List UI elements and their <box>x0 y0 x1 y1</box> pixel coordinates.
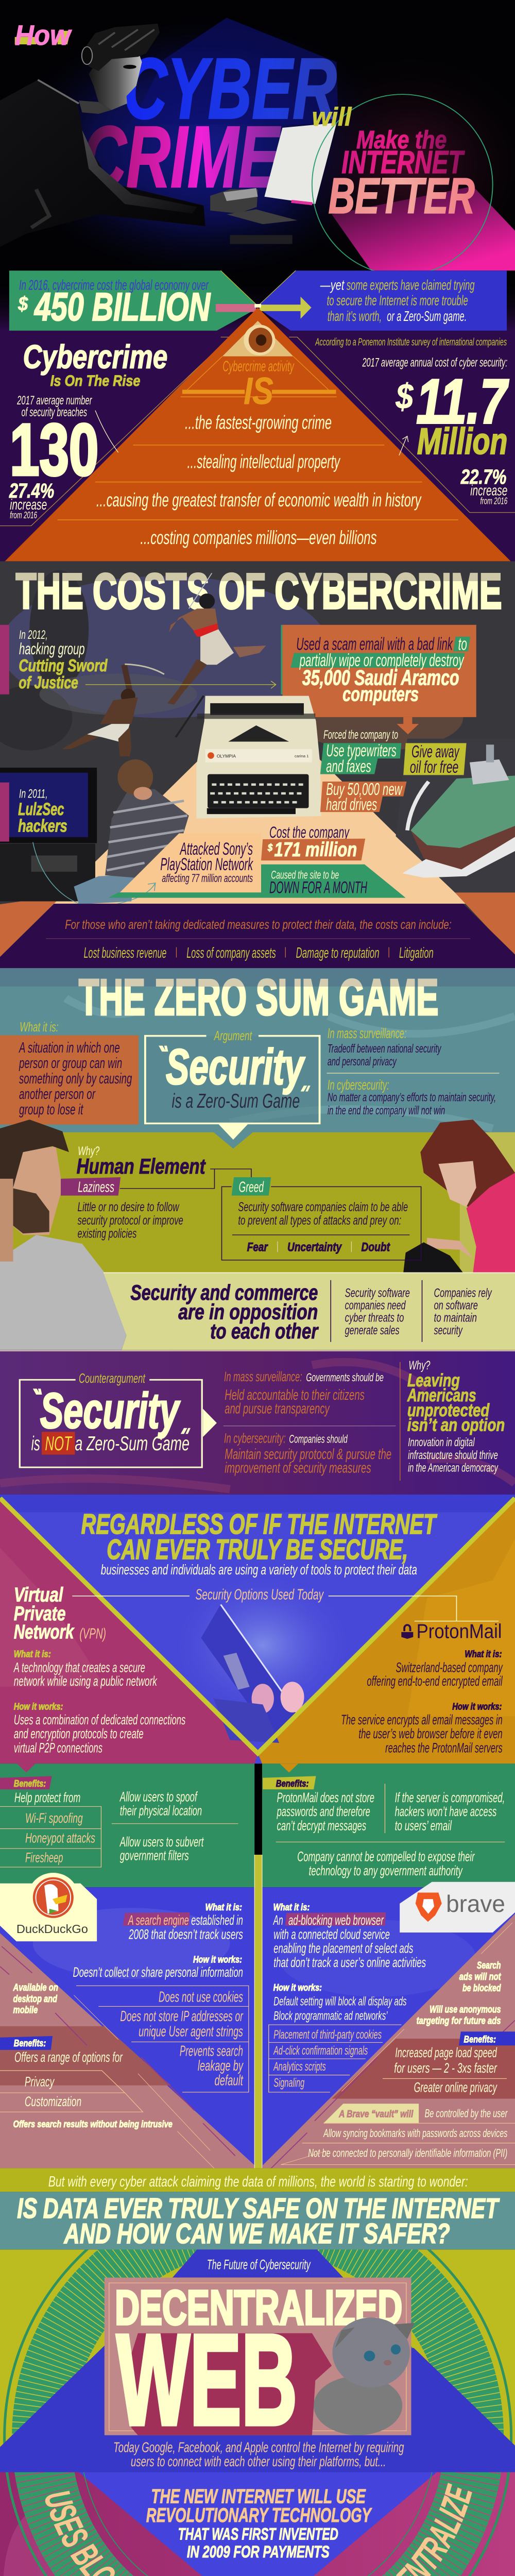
title: Make the Internet Better: Make the <box>356 126 447 154</box>
text block: greed: to prevent all types of attacks and prey on: <box>238 1213 401 1228</box>
panel: decentralized web <box>0 2277 515 2576</box>
panel: cybercrime is on the rise: Cybercrime <box>23 338 167 376</box>
panel: DuckDuckGo benefits: Offers search results without being intrusive <box>13 2119 173 2130</box>
panel: cybercrime is on the rise: Is On The Rise <box>50 372 140 389</box>
heading: regardless of if the internet <box>81 1509 437 1578</box>
panel: Brave text: Signaling <box>273 2076 304 2090</box>
panel: annual cost: $ <box>396 377 414 416</box>
panel: DuckDuckGo text: unique User agent strings <box>139 2024 243 2040</box>
text block: human element: Laziness <box>78 1179 114 1195</box>
text block: counter applications: improvement of security measures <box>225 1460 371 1476</box>
text block: greed: Fear <box>247 1241 268 1254</box>
text block: greed: Greed <box>239 1179 264 1195</box>
panel: DuckDuckGo benefits: Benefits: <box>14 2038 46 2049</box>
panel: VPN: Private <box>14 1602 66 1624</box>
text block: what it is: something only by causing <box>19 1071 132 1087</box>
callout: Aramco consequences: Buy 50,000 new <box>326 780 403 799</box>
text block: human element: Human Element <box>77 1155 206 1179</box>
text block: greed: Doubt <box>362 1241 390 1254</box>
text: pyramid statements <box>96 412 422 549</box>
panel: hero and pyramid <box>0 0 515 591</box>
counterargument box: a Zero-Sum Game <box>75 1432 190 1454</box>
panel: VPN benefits: Help protect from <box>14 1790 80 1805</box>
panel: VPN benefits <box>0 1776 238 1867</box>
icon: DuckDuckGo logo: DuckDuckGo <box>16 1923 88 1936</box>
green benefits panels <box>0 1764 515 1887</box>
text block: human element: security protocol or improve <box>78 1213 183 1228</box>
panel: DuckDuckGo benefits: Privacy <box>25 2074 55 2089</box>
panel: VPN benefits: Allow users to subvert <box>119 1834 204 1850</box>
callout: Sony PlayStation: affecting 77 million accounts <box>162 872 253 885</box>
panel: Brave benefits <box>281 1960 515 2165</box>
text: Cybercrime activity IS: Cybercrime activity <box>222 359 295 375</box>
panel: cybercrime is on the rise <box>9 338 167 521</box>
text: Cutting Sword of Justice <box>0 625 276 694</box>
illustration: typewriter: OLYMPIA <box>217 754 236 758</box>
icon: kitten <box>314 2317 415 2435</box>
panel: VPN benefits: Wi-Fi spoofing <box>25 1810 83 1826</box>
title: Make the Internet Better <box>329 126 475 224</box>
text block: what it is: What it is: <box>20 1019 59 1035</box>
panel: DuckDuckGo text: leakage by <box>198 2058 244 2074</box>
callout: Aramco consequences: hard drives <box>326 795 377 814</box>
panel: VPN benefits: government filters <box>120 1848 189 1863</box>
text block: human element <box>61 1144 251 1241</box>
text: new internet: THAT WAS FIRST INVENTED <box>178 2525 338 2544</box>
callout: cost of the attacks: $ <box>267 842 273 854</box>
icon: Brave logo <box>400 1882 515 1933</box>
text: Cutting Sword of Justice: hacking group <box>19 640 85 658</box>
panel: costs list band: Damage to reputation <box>296 945 380 961</box>
panel: ProtonMail <box>341 1620 503 1755</box>
text block: counter applications: Maintain security protocol & pursue the <box>225 1446 391 1463</box>
panel: Brave text: Block programmatic ad networks’ <box>273 2009 388 2023</box>
text block: counter applications: and pursue transparency <box>225 1401 330 1417</box>
panel: ProtonMail benefits: ProtonMail does not store <box>277 1790 374 1805</box>
counterargument box: Security <box>40 1383 181 1439</box>
panel: VPN: (VPN) <box>79 1626 106 1642</box>
panel: VPN benefits: Honeypot attacks <box>25 1831 95 1845</box>
panel: decentralized title box: WEB <box>116 2308 297 2452</box>
illustration: TV and stand: In 2011, <box>19 787 47 801</box>
panel: costs of cybercrime <box>0 561 515 970</box>
callout: Sony PlayStation: Attacked Sony’s <box>179 839 253 858</box>
text: new internet <box>146 2485 372 2561</box>
panel: ProtonMail: What it is: <box>465 1649 502 1659</box>
panel: security and commerce: on software <box>434 1299 478 1312</box>
illustration: typewriter <box>176 696 321 819</box>
text: pyramid statements: ...the fastest-growing crime <box>185 412 332 433</box>
callout: Saudi Aramco <box>281 625 476 734</box>
long shadow of BETTER <box>332 187 515 270</box>
security options used today label <box>72 1587 499 1621</box>
panel: ProtonMail benefits: to users’ email <box>395 1818 452 1833</box>
pyramid tier lines <box>58 445 458 520</box>
panel: DuckDuckGo text: A search engine <box>128 1912 189 1928</box>
panel: cybercrime is on the rise: 130 <box>10 409 98 490</box>
panel: security and commerce: generate sales <box>345 1324 400 1337</box>
icon: laptop screen <box>264 123 337 205</box>
callout: Aramco consequences: oil for free <box>410 757 458 776</box>
panel: security and commerce <box>104 1273 515 1350</box>
text block: counter applications: In mass surveillance: <box>224 1369 302 1384</box>
text block: what it is: person or group can win <box>19 1056 122 1072</box>
panel: costs list band: Litigation <box>399 945 434 961</box>
panel: DuckDuckGo text: 2008 that doesn’t track users <box>128 1927 243 1942</box>
text block: leaving Americans unprotected <box>400 1359 505 1481</box>
photo: frustrated woman <box>403 1120 515 1273</box>
text block: human element: Little or no desire to follow <box>78 1199 180 1214</box>
panel: VPN benefits: their physical location <box>120 1803 202 1818</box>
text: Cybercrime activity IS <box>181 359 337 412</box>
illustration: TV and stand: hackers <box>18 816 67 836</box>
text block: applications of the argument <box>327 1026 499 1117</box>
panel: cybercrime is on the rise: 2017 average number <box>17 394 92 408</box>
arrow: curved LulzSec pointer <box>33 842 156 907</box>
panel: cybercrime is on the rise: 27.4% <box>9 479 54 502</box>
illustration: phone in hand <box>201 1604 304 1743</box>
panel: ProtonMail benefits <box>263 1776 505 1878</box>
callout: cost of the attacks: Caused the site to be <box>271 868 339 881</box>
counterargument box: is <box>31 1432 40 1454</box>
illustration: crouching fighter <box>62 664 164 756</box>
callout: cost of the attacks: DOWN FOR A MONTH <box>269 878 367 897</box>
panel: security and commerce: security <box>434 1324 463 1337</box>
panel: DuckDuckGo text <box>73 1902 249 2092</box>
panel: annual cost <box>315 335 509 506</box>
panel: cybercrime is on the rise: of security breaches <box>21 405 87 419</box>
band: but with every cyber attack <box>0 2168 515 2192</box>
callout: Saudi Aramco: computers <box>342 683 419 705</box>
panel: security and commerce: are in opposition <box>178 1300 318 1324</box>
banner: 450 billion: 450 BILLION <box>34 285 211 329</box>
panel: VPN: What it is: <box>14 1649 51 1659</box>
photo: worried man <box>0 1120 127 1350</box>
panel: cybercrime is on the rise: increase <box>10 497 47 513</box>
illustration: jumping fighter <box>167 573 266 705</box>
panel: DuckDuckGo text: Prevents search <box>180 2043 243 2059</box>
panel: DuckDuckGo text: What it is: <box>205 1902 242 1913</box>
text block: counter applications: Governments should be <box>306 1371 384 1384</box>
panel: costs list band: Lost business revenue <box>84 945 166 961</box>
panel: VPN benefits: Benefits: <box>14 1778 46 1789</box>
text block: counter applications: Held accountable to their citizens <box>225 1387 365 1403</box>
callout: Aramco consequences: Use typewriters <box>326 741 397 760</box>
panel: VPN: and encryption protocols to create <box>14 1726 144 1741</box>
panel: Brave text: ad-blocking web browser <box>288 1912 384 1928</box>
text: Cutting Sword of Justice: Cutting Sword <box>19 656 108 675</box>
counterargument box: Counterargument <box>79 1370 146 1386</box>
panel: security and commerce: companies need <box>345 1299 406 1312</box>
panel: ProtonMail benefits: can’t decrypt messages <box>277 1818 366 1833</box>
blue chevron <box>0 2345 515 2472</box>
background blobs <box>3 2507 512 2576</box>
text: Cutting Sword of Justice: In 2012, <box>19 628 47 641</box>
panel: DuckDuckGo benefits: Offers a range of options for <box>14 2049 123 2064</box>
title: Make the Internet Better: INTERNET <box>341 144 465 180</box>
illustration: oil tanker <box>396 739 515 892</box>
callout: cost of the attacks: 171 million <box>274 838 357 861</box>
security options used today label: Security Options Used Today <box>195 1587 324 1603</box>
hero circle <box>312 94 493 275</box>
panel: olive why <box>0 1132 515 1273</box>
panel: Brave text: enabling the placement of select ads <box>273 1941 413 1956</box>
illustration: man at laptop <box>0 24 297 247</box>
arrow: banner pointer <box>216 297 312 319</box>
panel: DuckDuckGo text: established in <box>191 1912 243 1928</box>
panel: Brave text: with a connected cloud service <box>273 1927 390 1942</box>
panel: Brave benefits: Search <box>477 1960 501 1971</box>
text block: applications of the argument: In cybersecurity: <box>328 1077 389 1093</box>
argument quote box: Argument <box>214 1028 252 1043</box>
illustration: TV and stand: LulzSec <box>18 799 64 819</box>
panel: security and commerce: to maintain <box>434 1311 477 1325</box>
panel: DuckDuckGo text: Doesn’t collect or share personal information <box>73 1964 243 1980</box>
text block: what it is: group to lose it <box>19 1101 83 1117</box>
icon: DuckDuckGo logo <box>0 1873 97 1941</box>
panel: DuckDuckGo text: Does not store IP addresses or <box>120 2009 244 2025</box>
panel: Brave text: Placement of third-party cookies <box>273 2028 382 2042</box>
blue triangle <box>79 2472 437 2576</box>
text block: counter applications: In cybersecurity: <box>224 1431 286 1446</box>
illustration: TV and stand <box>0 768 97 901</box>
ring band: blockchain arc <box>5 2472 510 2576</box>
text: today Google Facebook Apple <box>113 2440 404 2470</box>
panel: ProtonMail benefits: Benefits: <box>276 1778 308 1789</box>
banner: 450 billion: $ <box>18 294 28 315</box>
panel: VPN: network while using a public network <box>14 1674 158 1689</box>
text block: applications of the argument: In mass surveillance: <box>328 1026 407 1042</box>
banner: the future of cybersecurity: The Future of Cybersecurity <box>207 2257 311 2272</box>
text block: what it is <box>0 1019 139 1125</box>
panel: VPN: virtual P2P connections <box>14 1740 102 1755</box>
text block: leaving Americans unprotected: Leaving <box>407 1370 460 1390</box>
callout: Saudi Aramco: to <box>458 634 467 654</box>
panel: VPN: Uses a combination of dedicated connections <box>14 1712 185 1727</box>
text: Cutting Sword of Justice: of Justice <box>19 673 78 692</box>
text: new internet: THE NEW INTERNET WILL USE <box>151 2485 366 2507</box>
text block: counter applications: Companies should <box>289 1433 348 1445</box>
text block: what it is: A situation in which one <box>19 1040 120 1056</box>
background haze <box>0 570 463 751</box>
text block: greed: Uncertainty <box>287 1241 342 1254</box>
banner: 450 billion: —yet <box>320 278 345 293</box>
panel: Brave benefits: A Brave “vault” will <box>338 2109 414 2120</box>
panel: security and commerce: Security software <box>345 1286 410 1300</box>
icon: Brave logo: brave <box>446 1891 505 1917</box>
illustration: gamer from behind <box>74 759 189 904</box>
panel: cybercrime is on the rise: from 2016 <box>10 510 37 521</box>
text block: counter applications <box>224 1369 396 1476</box>
text block: what it is: another person or <box>19 1086 96 1103</box>
callout: Sony PlayStation <box>120 833 261 892</box>
title word: How: How <box>15 20 72 52</box>
panel: pyramid <box>5 308 511 561</box>
panel: DuckDuckGo benefits: mobile <box>13 2005 38 2015</box>
panel: Brave benefits: Benefits: <box>464 2034 496 2045</box>
panel: VPN: Virtual <box>14 1584 64 1606</box>
argument quote box: is a Zero-Sum Game <box>172 1090 300 1112</box>
background wedges <box>0 1855 515 2173</box>
panel: security and commerce: to each other <box>210 1319 319 1343</box>
panel: DuckDuckGo benefits: desktop and <box>13 1993 57 2005</box>
background wedges <box>0 1495 515 1764</box>
panel: costs list band: Loss of company assets <box>186 945 276 961</box>
panel: security and commerce: Security and commerce <box>130 1281 318 1305</box>
panel: DuckDuckGo benefits: Available on <box>13 1982 58 1993</box>
purple background <box>0 281 515 564</box>
counterargument box <box>20 1370 217 1467</box>
panel: Brave text: Ad-click confirmation signals <box>273 2044 368 2058</box>
callout: Sony PlayStation: PlayStation Network <box>160 854 253 874</box>
panel: Brave text <box>269 1902 426 2092</box>
panel: security options <box>0 1495 515 1887</box>
counterargument box: NOT <box>45 1432 73 1454</box>
panel: VPN: Network <box>14 1620 75 1643</box>
banner: 450 billion: In 2016, cybercrime cost the global economy over <box>19 278 209 293</box>
panel: Brave text: What it is: <box>273 1902 310 1913</box>
text block: human element: existing policies <box>78 1226 136 1241</box>
callout: Aramco consequences <box>320 728 467 814</box>
panel: security and commerce: cyber threats to <box>345 1311 404 1325</box>
illustration: typewriter: carina 1 <box>295 754 308 758</box>
background: olive with rings <box>0 2183 515 2576</box>
panel: counterargument background <box>0 1350 515 1495</box>
text: new internet: IN 2009 FOR PAYMENTS <box>187 2543 330 2561</box>
panel: ProtonMail benefits: passwords and therefore <box>277 1804 370 1819</box>
panel: VPN benefits: Allow users to spoof <box>119 1789 198 1804</box>
argument quote box: Security <box>166 1039 305 1095</box>
hero glow <box>0 12 515 284</box>
callout: Aramco consequences: and faxes <box>326 757 371 776</box>
argument quote box <box>145 1028 320 1148</box>
magenta background <box>0 2472 515 2576</box>
panel: Brave text: An <box>272 1912 283 1928</box>
panel: DuckDuckGo benefits: Customization <box>25 2094 81 2109</box>
panel: Brave text: How it works: <box>273 1982 322 1993</box>
panel: VPN: How it works: <box>14 1702 63 1712</box>
text block: human element: Why? <box>78 1144 100 1158</box>
band: is data ever truly safe <box>0 2192 515 2250</box>
panel: costs list band <box>0 904 515 970</box>
panel: DuckDuckGo benefits <box>0 1982 173 2130</box>
panel: DuckDuckGo text: default <box>214 2073 244 2089</box>
text: Cybercrime activity IS: IS <box>244 370 273 412</box>
panel: VPN: A technology that creates a secure <box>13 1660 145 1675</box>
panel: VPN benefits: Firesheep <box>25 1850 63 1865</box>
panel: Brave text: Analytics scripts <box>273 2060 326 2074</box>
icon: all-seeing eye <box>222 321 294 357</box>
banner: the future of cybersecurity <box>173 2249 343 2278</box>
callout: cost of the attacks: Cost the company <box>269 824 350 842</box>
title word: will: will <box>312 103 352 131</box>
text block: applications of the argument: and personal privacy <box>328 1055 397 1069</box>
panel: DuckDuckGo and Brave <box>0 1855 515 2576</box>
panel: zero sum game <box>0 968 515 1495</box>
text block: leaving Americans unprotected: Americans <box>407 1385 476 1405</box>
panel: DuckDuckGo text: Does not use cookies <box>159 1989 243 2005</box>
callout: cost of the attacks <box>108 824 406 898</box>
panel: DuckDuckGo text: How it works: <box>193 1954 242 1965</box>
panel: Brave text: Default setting will block all display ads <box>273 1995 407 2008</box>
text block: greed <box>221 1177 421 1260</box>
banner: 450 billion <box>9 270 507 331</box>
callout: Aramco consequences: Give away <box>411 742 460 761</box>
title word: CRIME: CRIME <box>82 108 281 206</box>
text block: leaving Americans unprotected: Why? <box>408 1359 431 1372</box>
panel: VPN <box>13 1584 185 1755</box>
icon: ProtonMail shield <box>401 1624 413 1639</box>
banner: 450 billion: than it’s worth, <box>328 309 382 324</box>
illustration: peach base and side wedges <box>0 700 515 957</box>
pyramid outer lines <box>0 337 515 526</box>
title word: CYBER: CYBER <box>123 40 337 137</box>
callout: Aramco consequences: Forced the company to <box>323 728 398 741</box>
text: pyramid statements: ...stealing intellectual property <box>187 451 341 472</box>
teal background <box>0 968 515 1132</box>
text: new internet: REVOLUTIONARY TECHNOLOGY <box>146 2504 372 2526</box>
